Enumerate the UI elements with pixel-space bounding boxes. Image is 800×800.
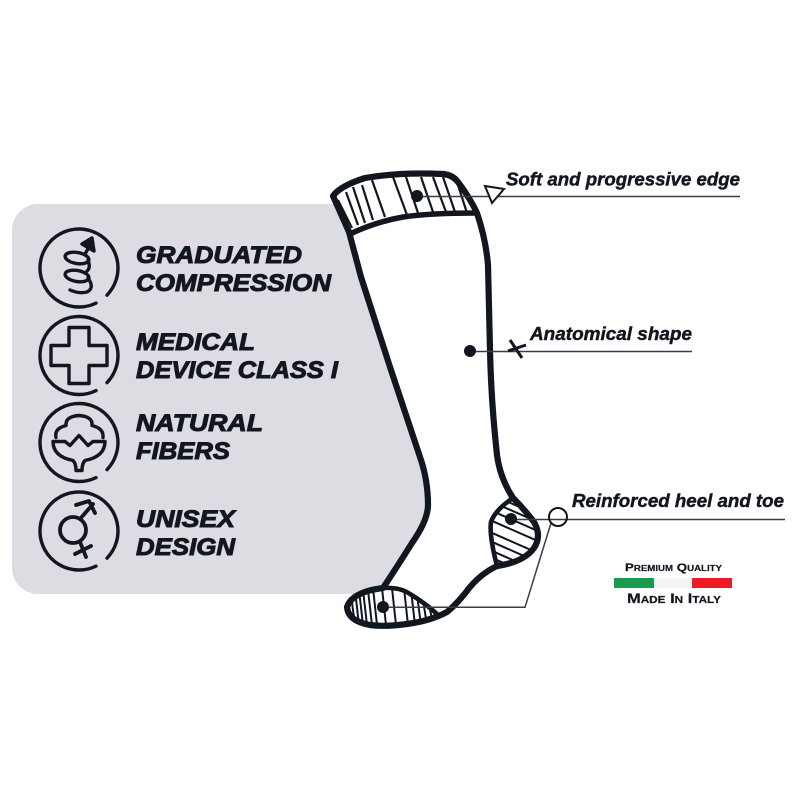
heading: graduated compression: GRADUATED	[136, 242, 302, 269]
toe hatching	[351, 590, 432, 623]
sock illustration	[333, 174, 540, 626]
heading: medical device: DEVICE CLASS I	[136, 357, 339, 384]
callout: anatomical shape	[464, 323, 692, 358]
badge: made in italy	[614, 562, 732, 606]
callout: anatomical shape: Anatomical shape	[529, 323, 692, 344]
heading: natural fibers: FIBERS	[136, 438, 230, 465]
heel patch	[491, 498, 513, 566]
heading: medical device: MEDICAL	[136, 329, 255, 356]
callout: reinforced heel and toe: Reinforced heel and toe	[572, 490, 784, 511]
badge: made in italy: Premium Quality	[625, 562, 723, 574]
heading: unisex design: DESIGN	[136, 534, 236, 561]
callout: soft edge	[411, 168, 740, 203]
heading: graduated compression: COMPRESSION	[136, 270, 332, 297]
icon: cotton boll	[40, 404, 118, 482]
heading: medical device	[136, 329, 339, 384]
cuff seam	[350, 213, 477, 234]
icon: graduated compression	[40, 229, 118, 307]
callout: reinforced heel and toe	[377, 490, 785, 613]
toe patch	[383, 588, 437, 614]
icon: medical cross	[40, 317, 118, 395]
badge: made in italy: Made In Italy	[627, 590, 721, 606]
callout: soft edge: Soft and progressive edge	[506, 168, 740, 190]
heading: natural fibers: NATURAL	[136, 410, 263, 437]
heading: unisex design	[136, 506, 237, 561]
cuff hatching	[338, 177, 467, 228]
heading: graduated compression	[136, 242, 332, 297]
sock body	[333, 174, 538, 626]
icon: unisex symbol	[40, 492, 118, 570]
heel hatching	[493, 502, 535, 562]
panel: features background	[12, 204, 452, 594]
heading: unisex design: UNISEX	[136, 506, 237, 533]
heading: natural fibers	[136, 410, 263, 465]
